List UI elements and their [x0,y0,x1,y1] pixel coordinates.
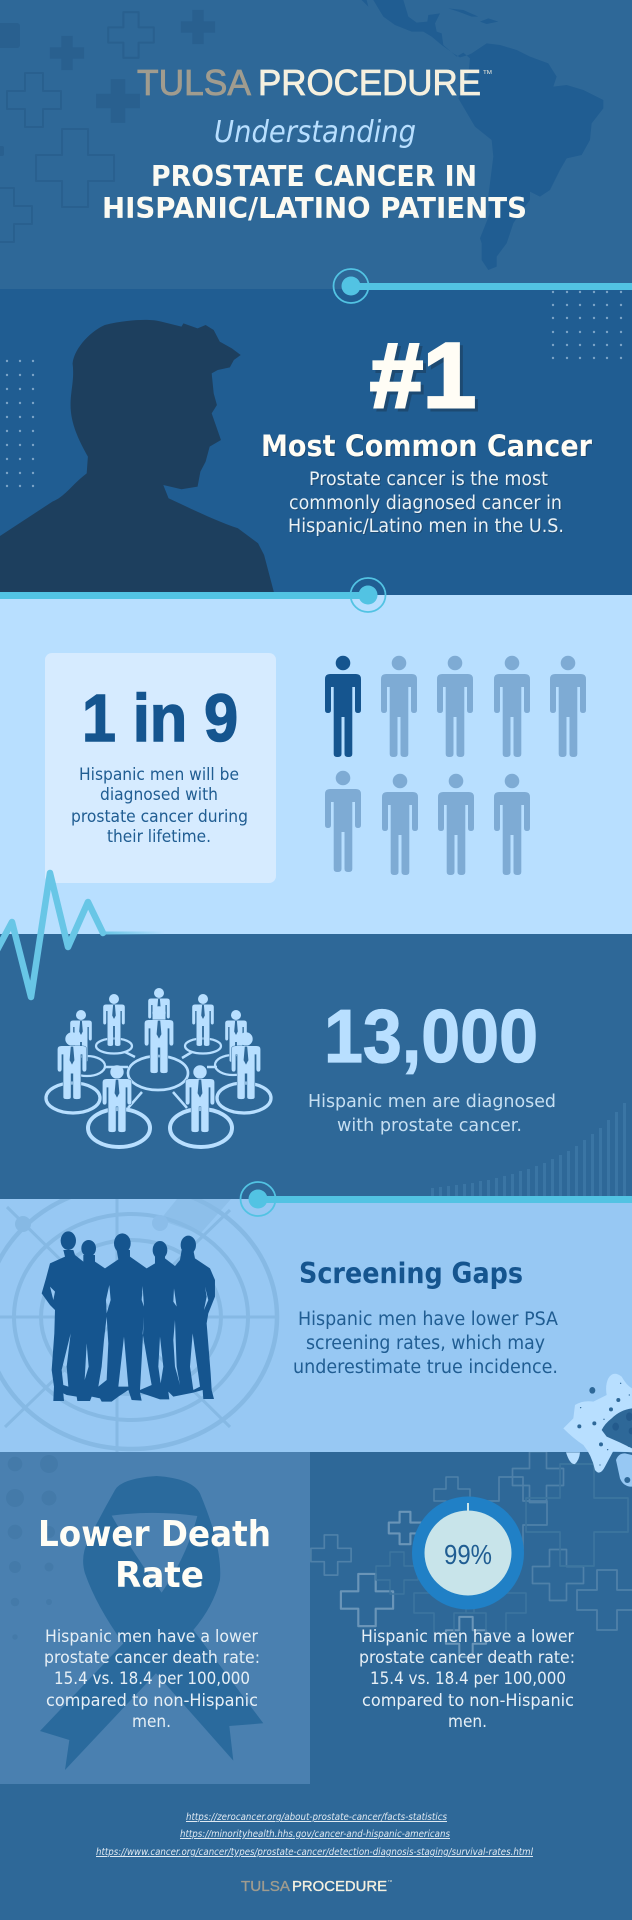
text: one in nine description: Hispanic men will be [79,765,239,784]
text: one in nine description: their lifetime. [107,827,211,846]
text: death rate description right: compared to non-Hispanic [362,1691,574,1710]
panel: header [0,0,604,270]
stat: one in nine: 1 in 9 [82,681,238,756]
header cross pattern [0,10,215,242]
chart: 99 percent donut [412,1496,524,1610]
footer logo: TM [388,1879,392,1883]
text: one in nine description: prostate cancer during [71,807,248,826]
rising bars decoration [431,1103,626,1196]
radar background [0,1185,277,1452]
cross pattern [311,1452,632,1657]
icon: connected people network [46,988,271,1147]
panel: most common cancer [0,289,632,595]
text: 13,000 description: Hispanic men are diagnosed [308,1091,556,1112]
stat: 13,000: 13,000 [324,994,538,1078]
heading: lower death rate [38,1514,271,1596]
text: death rate description right: Hispanic men have a lower [361,1627,574,1646]
text: death rate description right [359,1627,575,1731]
stat: number one: #1 [370,325,476,427]
footer logo [241,1878,392,1895]
panel: screening gaps [0,1185,632,1452]
heading: most common cancer: Most Common Cancer [261,429,593,463]
icon: nine people pictogram [325,656,586,875]
footer logo: TULSA [241,1878,290,1895]
heading: screening gaps: Screening Gaps [299,1257,523,1290]
subtitle: Understanding [214,115,416,150]
logo [137,62,492,103]
text: death rate description left: Hispanic men have a lower [45,1627,258,1646]
logo: PROCEDURE [258,62,481,103]
icon: heartbeat line [0,873,165,997]
title: HISPANIC/LATINO PATIENTS [102,192,527,225]
panel: one in nine [0,595,632,934]
footer logo: PROCEDURE [292,1878,387,1895]
text: most common cancer description [288,469,564,537]
title: PROSTATE CANCER IN [151,160,477,193]
map: Central and South America [362,0,603,270]
icon: awareness ribbon [40,1476,263,1770]
divider: header timeline [334,269,632,303]
source links: https://zerocancer.org/about-prostate-cancer/facts-statistics [186,1812,447,1823]
text: screening gaps description: screening rates, which may [306,1333,545,1354]
panel: lower death rate right [310,1452,632,1727]
text: most common cancer description: Prostate cancer is the most [309,469,548,490]
text: screening gaps description [293,1309,558,1378]
heading: lower death rate: Rate [115,1555,204,1596]
text: screening gaps description: underestimate true incidence. [293,1357,558,1378]
text: 13,000 description [308,1091,556,1136]
text: death rate description right: 15.4 vs. 18.4 per 100,000 [370,1669,566,1688]
text: death rate description left [44,1627,260,1731]
icon: paint splat [563,1374,632,1487]
source links: https://minorityhealth.hhs.gov/cancer-and-hispanic-americans [180,1829,450,1840]
text: death rate description left: prostate cancer death rate: [44,1648,260,1667]
text: death rate description left: 15.4 vs. 18.4 per 100,000 [54,1669,250,1688]
text: screening gaps description: Hispanic men have lower PSA [298,1309,558,1330]
text: death rate description left: compared to non-Hispanic [46,1691,258,1710]
card: one in nine [45,653,276,883]
fading dot column [6,1455,58,1640]
text: death rate description left: men. [132,1712,171,1731]
text: death rate description right: men. [448,1712,487,1731]
text: death rate description right: prostate cancer death rate: [359,1648,575,1667]
logo: TULSA [137,62,251,103]
source links [96,1812,533,1858]
heading: lower death rate: Lower Death [38,1514,271,1555]
text: most common cancer description: commonly diagnosed cancer in [289,493,562,514]
icon: group of five men [42,1231,215,1402]
divider: section three timeline [240,1182,632,1216]
text: one in nine description: diagnosed with [100,785,218,804]
dot grid left [6,360,34,487]
icon: man silhouette [0,320,274,593]
divider: section one timeline [0,578,386,612]
text: one in nine description [71,765,248,846]
logo: TM [483,70,492,76]
text: 13,000 description: with prostate cancer. [337,1115,522,1136]
dot grid right [552,291,622,359]
title [102,160,527,225]
panel: 13,000 [0,934,632,1199]
text: most common cancer description: Hispanic/Latino men in the U.S. [288,516,564,537]
panel: lower death rate left [0,1452,310,1784]
source links: https://www.cancer.org/cancer/types/prostate-cancer/detection-diagnosis-staging/survival-rates.html [96,1847,533,1858]
stat: 99 percent: 99% [444,1539,492,1570]
footer [96,1812,533,1895]
